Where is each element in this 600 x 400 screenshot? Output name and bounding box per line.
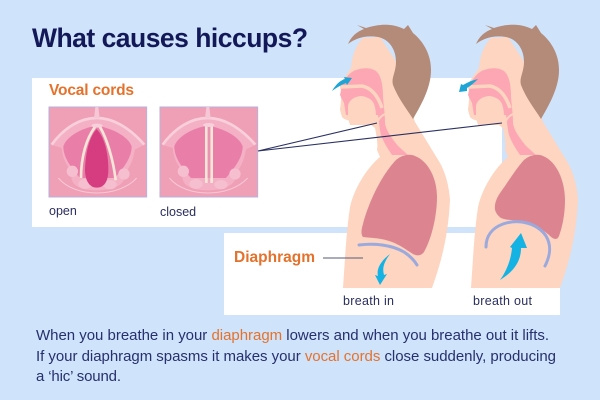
explanatory text: If your diaphragm spasms it makes your vocal cords close suddenly, producing — [36, 348, 556, 365]
title: What causes hiccups? — [32, 23, 308, 53]
panel: diaphragm background — [224, 233, 560, 315]
heading: diaphragm: Diaphragm — [234, 249, 315, 266]
illustration: vocal cords open — [49, 107, 147, 197]
illustration: vocal cords closed — [160, 107, 258, 197]
label: breath in: breath in — [343, 294, 394, 308]
label: closed: closed — [160, 205, 196, 219]
explanatory text: When you breathe in your diaphragm lowers and when you breathe out it lifts. — [36, 327, 549, 344]
pointer lines from vocal cords to throats — [258, 123, 502, 151]
pointer line to diaphragm — [323, 257, 363, 259]
heading: vocal cords: Vocal cords — [49, 82, 134, 99]
figure: breath out — [459, 25, 578, 288]
label: breath out: breath out — [473, 294, 533, 308]
label: open: open — [49, 204, 77, 218]
panel: vocal cords background — [32, 78, 502, 227]
explanatory text — [36, 327, 556, 385]
figure: breath in — [332, 25, 450, 288]
explanatory text: a ‘hic’ sound. — [36, 368, 121, 385]
